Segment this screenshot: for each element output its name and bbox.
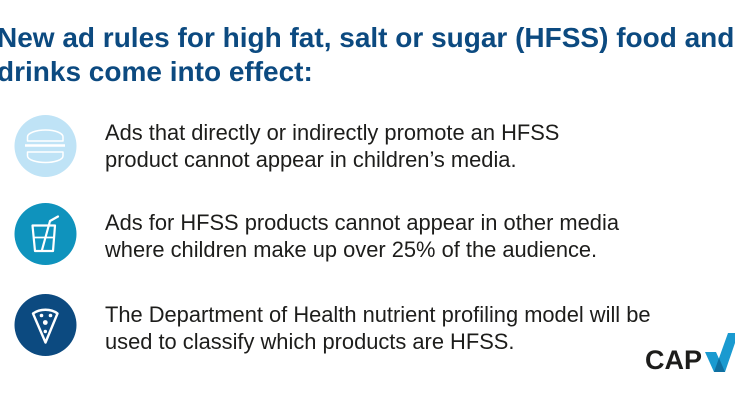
- title: New ad rules for high fat, salt or sugar (HFSS) food and: [0, 22, 734, 53]
- text: nutrient profiling rule: [105, 302, 651, 354]
- icon: drink with straw: [14, 203, 76, 265]
- logo: CAP: [645, 333, 735, 375]
- title: [0, 22, 734, 87]
- text: 25% audience rule: Ads for HFSS products cannot appear in other media: [105, 210, 619, 235]
- text: children's media rule: product cannot appear in children’s media.: [105, 147, 517, 172]
- logo: CAP: CAP: [645, 345, 702, 375]
- title: drinks come into effect:: [0, 56, 313, 87]
- text: 25% audience rule: [105, 210, 620, 262]
- text: children's media rule: [105, 120, 559, 172]
- text: nutrient profiling rule: The Department of Health nutrient profiling model will be: [105, 302, 651, 327]
- text: 25% audience rule: where children make up over 25% of the audience.: [105, 237, 597, 262]
- text: children's media rule: Ads that directly or indirectly promote an HFSS: [105, 120, 559, 145]
- text: nutrient profiling rule: used to classify which products are HFSS.: [105, 329, 514, 354]
- icon: burger: [14, 115, 76, 177]
- icon: pizza slice: [14, 294, 76, 356]
